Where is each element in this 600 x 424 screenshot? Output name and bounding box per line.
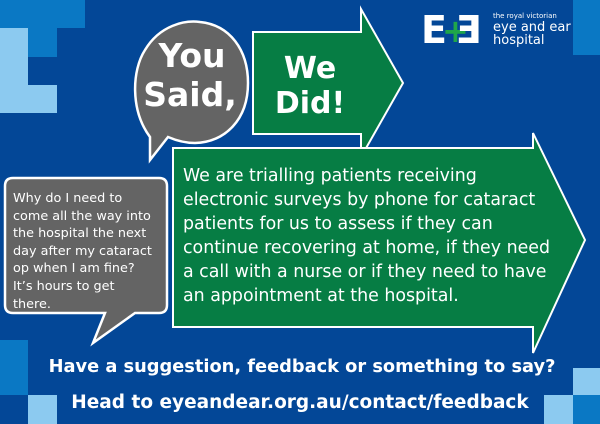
arrow: response: an appointment at the hospital. bbox=[183, 286, 459, 306]
arrow: response bbox=[173, 133, 585, 353]
arrow: response: continue recovering at home, if they need bbox=[183, 238, 550, 258]
speech box: question: op when I am fine? bbox=[13, 261, 135, 276]
speech box: question: the hospital the next bbox=[13, 226, 146, 241]
arrow: response: a call with a nurse or if they need to have bbox=[183, 262, 546, 282]
logo: E bbox=[421, 8, 447, 52]
bubble: You Said: You bbox=[157, 36, 226, 75]
call to action: Have a suggestion, feedback or something to say? bbox=[49, 356, 555, 377]
call to action bbox=[49, 356, 555, 413]
arrow: We Did bbox=[253, 9, 403, 157]
logo bbox=[421, 8, 571, 52]
speech box: question: there. bbox=[13, 297, 51, 312]
speech box: question bbox=[5, 178, 167, 343]
speech box: question: Why do I need to bbox=[13, 191, 122, 206]
arrow: We Did: We bbox=[284, 51, 336, 86]
arrow: We Did: Did! bbox=[275, 86, 345, 121]
bubble: You Said: Said, bbox=[143, 75, 237, 114]
bubble: You Said bbox=[135, 22, 248, 160]
logo: hospital bbox=[493, 33, 545, 48]
arrow: response: patients for us to assess if they can bbox=[183, 214, 493, 234]
logo: E bbox=[456, 8, 482, 52]
speech box: question: It’s hours to get bbox=[13, 279, 115, 294]
speech box: question: day after my cataract bbox=[13, 244, 152, 259]
arrow: response: electronic surveys by phone for cataract bbox=[183, 190, 535, 210]
call to action: Head to eyeandear.org.au/contact/feedback bbox=[71, 392, 529, 413]
logo: eye and ear bbox=[493, 20, 571, 35]
logo: + bbox=[442, 12, 469, 50]
speech box: question: come all the way into bbox=[13, 209, 151, 224]
arrow: response: We are trialling patients receiving bbox=[183, 166, 477, 186]
logo: the royal victorian bbox=[493, 12, 557, 20]
